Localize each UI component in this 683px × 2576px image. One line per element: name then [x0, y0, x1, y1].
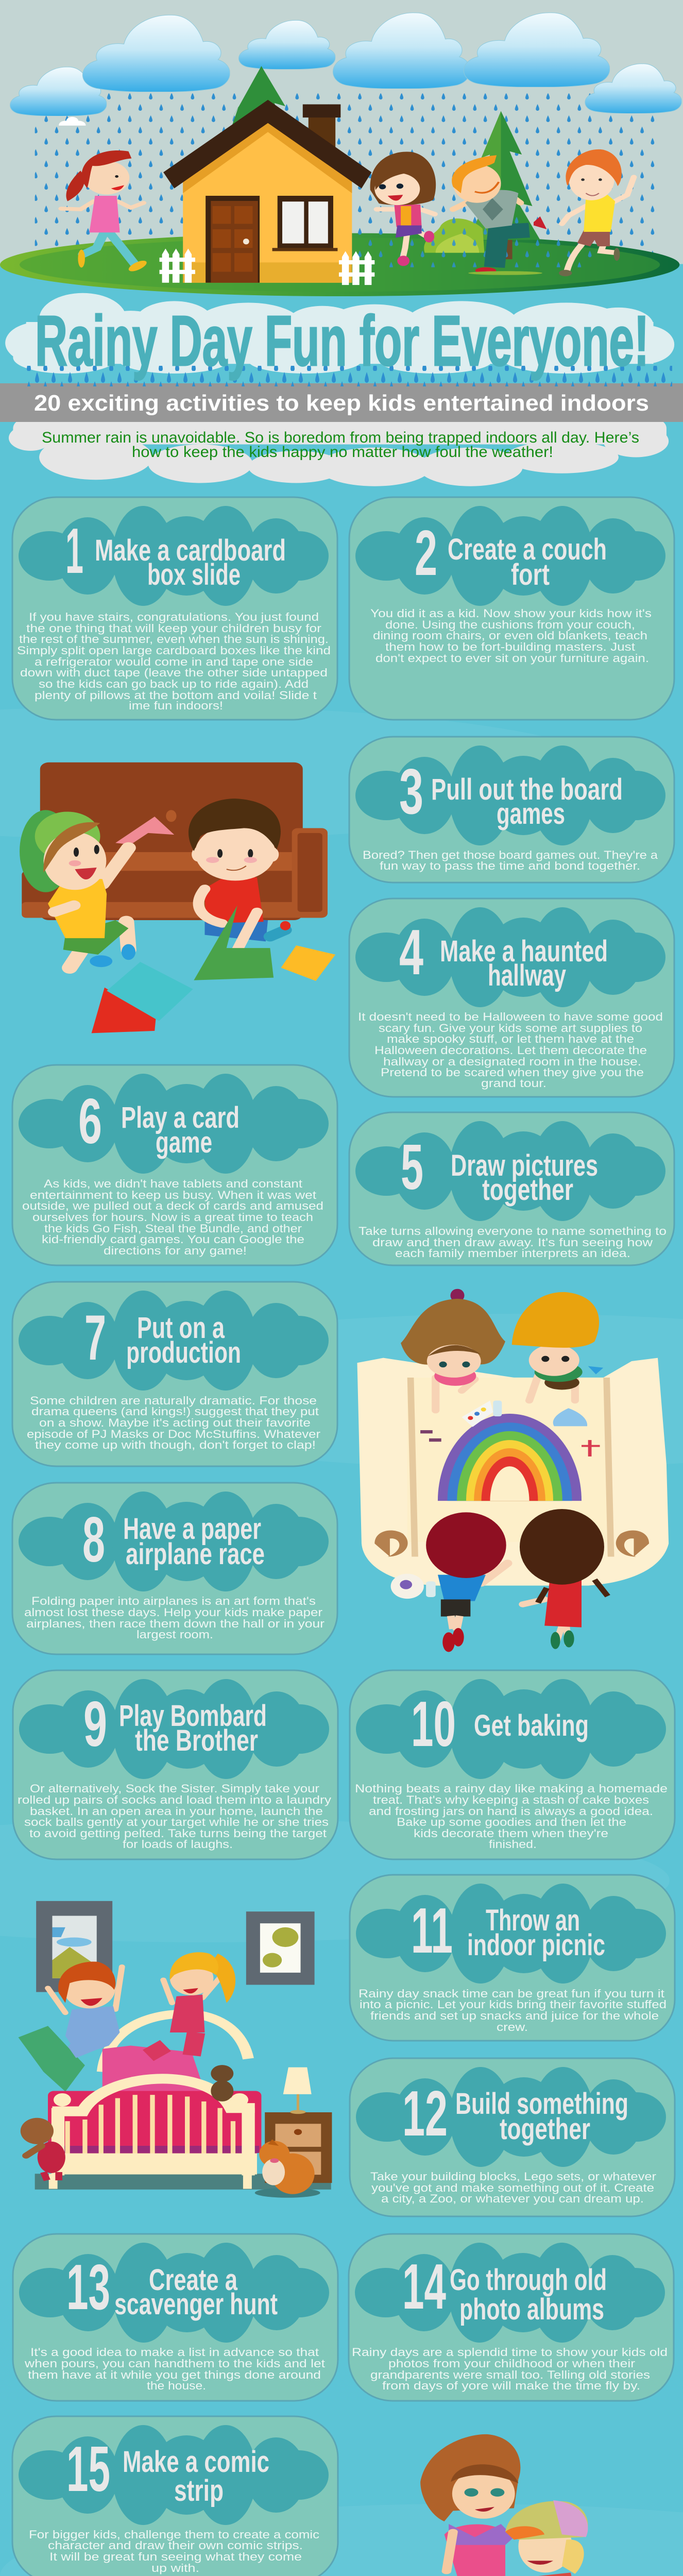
- number 12: 12: [402, 2078, 448, 2149]
- body 13: [24, 2346, 325, 2392]
- rainbow: [438, 1414, 582, 1501]
- body 13: them have at it while you get things done around: [28, 2368, 321, 2381]
- number 2: 2: [415, 518, 437, 589]
- body 9: to avoid getting pelted. Take turns being the target: [29, 1827, 327, 1840]
- heading 15: strip: [174, 2474, 224, 2507]
- intro text: how to keep the kids happy no matter how foul the weather!: [132, 444, 553, 461]
- body 4: Pretend to be scared when they give you the: [381, 1066, 644, 1079]
- nightstand and lamp: [265, 2067, 332, 2183]
- body 8: largest room.: [136, 1628, 213, 1641]
- boy in blue pajamas: [48, 1962, 122, 2056]
- body 11: Rainy day snack time can be great fun if you turn it: [358, 1987, 664, 2000]
- card 4: [349, 899, 674, 1097]
- card 15: [12, 2416, 338, 2576]
- body 7: Some children are naturally dramatic. For those: [30, 1394, 317, 1407]
- number 10: 10: [411, 1689, 456, 1760]
- body 1: If you have stairs, congratulations. You just found: [29, 611, 319, 623]
- body 2: them how to be fort-building masters. Just: [385, 640, 635, 653]
- intro text: [42, 429, 639, 461]
- body 10: treat. That's why keeping a stash of cake boxes: [373, 1793, 649, 1806]
- card 8: [12, 1483, 337, 1654]
- body 1: plenty of pillows at the bottom and voila! Slide t: [35, 689, 317, 702]
- body 10: finished.: [489, 1838, 537, 1851]
- body 10: kids decorate them when they're: [414, 1827, 608, 1840]
- body 15: up with.: [151, 2562, 199, 2574]
- number 15: 15: [66, 2434, 110, 2505]
- heading 12: together: [500, 2112, 590, 2146]
- body 2: don't expect to ever sit on your furniture again.: [375, 652, 649, 665]
- card 11: [350, 1875, 675, 2041]
- number 7: 7: [84, 1302, 106, 1374]
- heading 9: Play Bombard: [119, 1699, 267, 1733]
- body 8: almost lost these days. Help your kids make paper: [24, 1606, 322, 1619]
- heading 11: [467, 1904, 605, 1962]
- heading 1: [95, 534, 286, 591]
- body 12: [370, 2170, 656, 2205]
- body 10: Bake up some goodies and then let the: [397, 1816, 626, 1828]
- heading 6: [121, 1101, 240, 1159]
- heading 12: Build something: [455, 2087, 628, 2121]
- heading 3: Pull out the board: [431, 773, 623, 806]
- body 6: outside, we pulled out a deck of cards and amused: [22, 1199, 323, 1212]
- heading 3: games: [497, 797, 565, 831]
- heading 8: [123, 1512, 265, 1571]
- body 1: a refrigerator would come in and tape one side: [35, 655, 313, 668]
- heading 4: Make a haunted: [440, 935, 608, 968]
- heading 1: Make a cardboard: [95, 534, 286, 567]
- illustration: kids jumping on a bed: [19, 1901, 332, 2198]
- body 1: the one thing that will keep your children busy for: [26, 622, 321, 635]
- body 5: draw and then draw away. It's fun seeing how: [372, 1236, 653, 1249]
- body 4: hallway or a designated room in the house.: [383, 1055, 641, 1068]
- heading 5: [451, 1149, 598, 1207]
- body 3: Bored? Then get those board games out. They're a: [363, 849, 658, 861]
- body 3: [363, 849, 658, 872]
- subtitle band: [0, 383, 683, 422]
- heading 14: [450, 2263, 607, 2326]
- body 4: make spooky stuff, or let them have at the: [387, 1032, 634, 1045]
- body 9: Or alternatively, Sock the Sister. Simply take your: [30, 1782, 319, 1795]
- card 6: [12, 1065, 337, 1265]
- heading 12: [455, 2087, 628, 2146]
- number 13: 13: [66, 2252, 110, 2323]
- paper shapes: [92, 817, 335, 1033]
- heading 3: [431, 773, 623, 831]
- kid: boy in grey shirt: [452, 155, 547, 275]
- big girl: [420, 2434, 520, 2576]
- kid: brown haired girl: [370, 151, 436, 266]
- body 11: into a picnic. Let your kids bring their favorite stuffed: [360, 1998, 667, 2011]
- girl in red pajamas: [148, 1952, 235, 2056]
- body 7: drama queens (and kings!) suggest that they put: [31, 1405, 319, 1418]
- back tree: [231, 66, 285, 129]
- right tree and bush: [424, 111, 540, 259]
- body 2: dining room chairs, or even old blankets, teach: [373, 629, 647, 642]
- heading 5: Draw pictures: [451, 1149, 598, 1182]
- card 9: [13, 1670, 338, 1859]
- body 14: from days of yore will make the time fly by.: [382, 2379, 640, 2392]
- body 14: Rainy days are a splendid time to show your kids old: [352, 2346, 668, 2359]
- number 6: 6: [78, 1086, 102, 1157]
- body 8: airplanes, then race them down the hall or in your: [26, 1617, 325, 1630]
- heading 15: [123, 2445, 269, 2507]
- body 4: grand tour.: [481, 1077, 547, 1090]
- heading 7: production: [126, 1336, 241, 1369]
- card 5: [349, 1112, 674, 1265]
- card 12: [350, 2058, 675, 2216]
- heading 6: Play a card: [121, 1101, 240, 1134]
- body 1: down with duct tape (leave the other side untapped: [20, 666, 328, 679]
- card 3: [349, 737, 674, 883]
- heading 11: Throw an: [486, 1904, 580, 1937]
- body 6: [22, 1177, 323, 1257]
- body 14: photos from your childhood or when their: [388, 2357, 635, 2370]
- body 14: grandparents were small too. Telling old stories: [370, 2368, 650, 2381]
- body 6: As kids, we didn't have tablets and constant: [44, 1177, 302, 1190]
- body 7: episode of PJ Masks or Doc McStuffins. Whatever: [27, 1428, 320, 1440]
- heading 4: [440, 935, 608, 992]
- body 4: Halloween decorations. Let them decorate the: [374, 1044, 647, 1057]
- number 4: 4: [399, 917, 423, 988]
- number 11: 11: [411, 1895, 453, 1967]
- body 5: [358, 1225, 667, 1260]
- number 5: 5: [401, 1132, 423, 1203]
- subtitle: 20 exciting activities to keep kids entertained indoors: [34, 391, 649, 416]
- heading 14: photo albums: [459, 2293, 604, 2326]
- body 13: It's a good idea to make a list in advance so that: [30, 2346, 319, 2359]
- body 15: [29, 2528, 319, 2574]
- heading 9: the Brother: [135, 1724, 258, 1757]
- boy with green cap: [20, 810, 135, 968]
- card 1: [12, 497, 337, 720]
- body 13: the house.: [147, 2379, 206, 2392]
- body 1: the rest of the summer, even when the sun is shining.: [19, 633, 329, 646]
- paints and cloud: [420, 1401, 600, 1456]
- body 8: [24, 1595, 325, 1641]
- body 7: on a show. Maybe it's acting out their favorite: [39, 1416, 311, 1429]
- body 6: kid-friendly card games. You can Google the: [42, 1233, 304, 1246]
- body 14: [352, 2346, 668, 2392]
- intro text: Summer rain is unavoidable. So is boredom from being trapped indoors all day. Here’s: [42, 429, 639, 446]
- boy at top of scroll: [512, 1292, 603, 1401]
- body 1: [17, 611, 331, 712]
- intro cloud: [9, 418, 669, 486]
- sofa: [22, 762, 328, 920]
- illustration: two boys on a sofa with paper planes: [20, 762, 335, 1033]
- body 5: each family member interprets an idea.: [395, 1247, 630, 1260]
- body 6: the kids Go Fish, Steal the Bundle, and other: [44, 1222, 302, 1235]
- body 11: friends and set up snacks and juice for the whole: [370, 2009, 659, 2022]
- heading 14: Go through old: [450, 2263, 607, 2297]
- body 6: directions for any game!: [104, 1244, 247, 1257]
- kid: red haired girl: [61, 150, 149, 273]
- heading 8: Have a paper: [123, 1512, 261, 1546]
- house: [163, 100, 371, 283]
- body 6: ourselves for hours. Now is a great time to teach: [32, 1211, 313, 1224]
- number 14: 14: [402, 2251, 446, 2323]
- body 2: You did it as a kid. Now show your kids how it's: [370, 607, 652, 620]
- boy with multicolour cap: [505, 2500, 588, 2576]
- body 15: For bigger kids, challenge them to create a comic: [29, 2528, 319, 2541]
- body 12: you've got and make something out of it. Create: [371, 2181, 654, 2194]
- body 15: It will be great fun seeing what they come: [49, 2550, 302, 2563]
- card 13: [13, 2234, 338, 2401]
- illustration: four kids painting a rainbow on a scroll: [357, 1289, 669, 1652]
- fences: [160, 248, 374, 285]
- card 14: [349, 2234, 674, 2401]
- body 2: [370, 607, 652, 665]
- teddy bears: [21, 2065, 233, 2180]
- body 9: [18, 1782, 331, 1851]
- body 13: when pours, you can handthem to the kids and let: [24, 2357, 325, 2370]
- number 9: 9: [83, 1689, 107, 1760]
- heading 10: Get baking: [474, 1709, 589, 1742]
- heading 6: game: [156, 1126, 212, 1159]
- number 8: 8: [82, 1504, 105, 1575]
- body 5: Take turns allowing everyone to name something to: [358, 1225, 667, 1238]
- hero illustration: rainy house scene: [0, 0, 683, 296]
- body 1: Simply split open large cardboard boxes like the kind: [17, 644, 331, 657]
- boy in red shirt: [189, 799, 291, 980]
- kid: boy in yellow shirt: [559, 149, 634, 276]
- ground: [0, 233, 679, 296]
- heading 2: fort: [511, 558, 550, 591]
- rain under title: [26, 366, 672, 386]
- heading 4: hallway: [488, 959, 566, 992]
- brown haired girl, back view: [520, 1509, 608, 1649]
- body 7: they come up with though, don't forget to clap!: [35, 1438, 316, 1451]
- body 4: scary fun. Give your kids some art supplies to: [379, 1022, 642, 1035]
- heading 7: Put on a: [137, 1311, 225, 1345]
- number 3: 3: [399, 756, 423, 827]
- body 9: rolled up pairs of socks and load them into a laundry: [18, 1793, 331, 1806]
- body 3: fun way to pass the time and bond together.: [380, 859, 640, 872]
- heading 13: Create a: [149, 2263, 238, 2297]
- body 10: [355, 1782, 668, 1851]
- heading 1: box slide: [147, 558, 241, 591]
- heading 5: together: [482, 1173, 573, 1207]
- heading 8: airplane race: [126, 1537, 265, 1571]
- body 10: and frosting jars on hand is always a good idea.: [369, 1805, 653, 1818]
- body 6: entertainment to keep us busy. When it was wet: [30, 1189, 316, 1201]
- dog: [255, 2139, 320, 2198]
- pillows: [19, 2026, 204, 2092]
- wall pictures: [36, 1901, 315, 1992]
- heading 2: Create a couch: [448, 533, 607, 566]
- red haired kid, back view: [391, 1512, 507, 1652]
- heading 13: scavenger hunt: [114, 2287, 278, 2321]
- headboard: [103, 2014, 248, 2072]
- scroll: [357, 1358, 669, 1586]
- body 1: so the kids can go back up to ride again). Add: [39, 677, 309, 690]
- body 7: [27, 1394, 320, 1451]
- illustration: kids reading on a picnic blanket: [346, 2434, 673, 2576]
- rain: [35, 93, 658, 261]
- heading 9: [119, 1699, 267, 1757]
- body 11: [358, 1987, 667, 2033]
- body 9: basket. In an open area in your home, launch the: [30, 1805, 323, 1818]
- card 10: [350, 1670, 675, 1859]
- heading 11: indoor picnic: [467, 1928, 605, 1962]
- body 4: It doesn't need to be Halloween to have some good: [358, 1010, 663, 1023]
- card 2: [349, 497, 674, 720]
- body 1: ime fun indoors!: [129, 699, 223, 712]
- card 7: [12, 1282, 337, 1466]
- bed: [35, 2079, 331, 2190]
- heading 13: [114, 2263, 278, 2321]
- body 4: [358, 1010, 663, 1090]
- girl at top of scroll: [401, 1289, 505, 1411]
- heading 7: [126, 1311, 241, 1369]
- body 10: Nothing beats a rainy day like making a homemade: [355, 1782, 668, 1795]
- body 11: crew.: [497, 2021, 528, 2033]
- body 15: character and draw their own comic strips.: [48, 2539, 303, 2552]
- body 12: Take your building blocks, Lego sets, or whatever: [370, 2170, 656, 2183]
- body 2: done. Using the cushions from your couch,: [385, 618, 635, 631]
- title cloud: [5, 293, 674, 374]
- heading 15: Make a comic: [123, 2445, 269, 2479]
- body 9: sock balls gently at your target while he or she tries: [24, 1816, 329, 1828]
- number 1: 1: [65, 516, 83, 587]
- clouds: [10, 13, 681, 126]
- body 8: Folding paper into airplanes is an art form that's: [31, 1595, 316, 1607]
- heading 2: [448, 533, 607, 591]
- body 9: for loads of laughs.: [123, 1838, 233, 1851]
- body 12: a city, a Zoo, or whatever you can dream up.: [381, 2192, 644, 2205]
